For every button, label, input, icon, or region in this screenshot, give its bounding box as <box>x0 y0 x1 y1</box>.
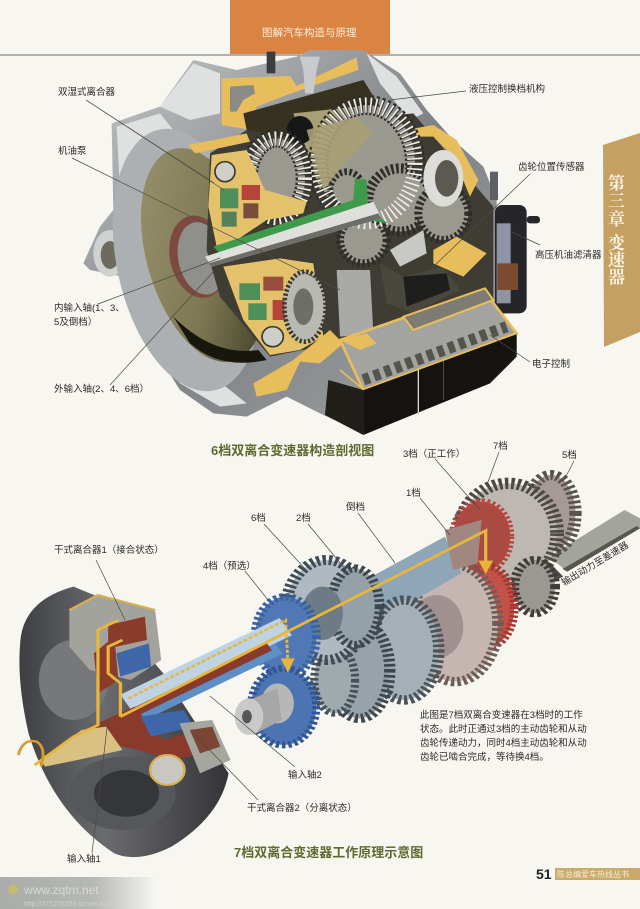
pink gear <box>410 565 498 682</box>
gears upper <box>248 105 468 263</box>
labels upper: 机油泵 <box>58 145 87 157</box>
upper clutch pack <box>208 150 307 247</box>
illustration: 6-speed transmission cutaway <box>83 50 540 435</box>
description text: 此图是7档双离合变速器在3档时的工作 <box>420 709 583 721</box>
chapter tab: 速 <box>608 250 626 270</box>
chapter tab: 变 <box>608 233 626 253</box>
input shaft green band <box>213 178 388 254</box>
yellow section inner hollow <box>230 85 255 112</box>
blue gears <box>251 597 316 745</box>
output hub <box>235 683 294 735</box>
bearing right <box>423 150 463 207</box>
labels lower: 干式离合器2（分离状态） <box>247 802 357 814</box>
leader lines upper <box>72 91 540 385</box>
input shaft <box>205 202 382 267</box>
bell ring <box>90 115 283 405</box>
description text: 状态。此时正通过3档的主动齿轮和从动 <box>420 723 587 735</box>
rotation arrow <box>18 741 43 767</box>
chapter tab: 器 <box>608 268 625 287</box>
labels upper: 外输入轴(2、4、6档） <box>54 383 149 395</box>
labels lower: 1档 <box>406 487 421 499</box>
housing highlights <box>117 53 423 407</box>
description text: 齿轮已啮合完成，等待换4档。 <box>420 751 549 763</box>
gear train lower right <box>337 230 487 337</box>
shift fork foreground <box>307 117 373 190</box>
oil filter <box>490 172 540 313</box>
yellow base section <box>253 330 343 397</box>
gear tooth highlights <box>248 105 415 222</box>
input shafts <box>98 627 286 730</box>
labels lower: 干式离合器1（接合状态） <box>54 544 164 556</box>
description text: 齿轮传递动力，同时4档主动齿轮和从动 <box>420 737 587 749</box>
labels lower: 输出动力至差速器 <box>559 539 631 589</box>
labels upper <box>54 83 602 395</box>
housing <box>83 50 517 433</box>
chapter tab: 第 <box>608 174 625 193</box>
bolt <box>300 57 320 93</box>
leader lines lower <box>92 452 574 853</box>
title: cutaway diagram: 6档双离合变速器构造剖视图 <box>211 443 374 458</box>
labels upper: 电子控制 <box>532 358 570 370</box>
labels lower: 倒档 <box>346 501 365 513</box>
page number strip <box>536 866 640 882</box>
electronic control black box <box>325 333 517 435</box>
output shaft <box>510 510 640 597</box>
labels upper: 液压控制换档机构 <box>469 83 545 95</box>
red gear 3 <box>453 502 510 572</box>
preselected flow arrow <box>129 620 295 698</box>
labels lower: 4档（预选） <box>203 560 256 572</box>
watermark: www.zqtm.net <box>23 883 99 897</box>
labels upper: 高压机油滤清器 <box>535 249 602 261</box>
clutch 1 <box>69 595 161 693</box>
flywheel <box>19 587 229 857</box>
chapter tab: 章 <box>608 210 625 229</box>
labels lower: 输入轴1 <box>67 853 101 865</box>
power flow arrow main <box>35 531 493 765</box>
labels upper: 齿轮位置传感器 <box>518 161 585 173</box>
top silver gears <box>459 475 576 613</box>
labels lower: 3档（正工作） <box>403 448 465 460</box>
labels upper: 内输入轴(1、3、 <box>54 302 125 314</box>
watermark: http://375278230.qzone.qq.com <box>24 901 123 908</box>
clutch bell olive <box>119 134 288 376</box>
labels upper: 5及倒档） <box>54 316 97 328</box>
labels lower: 输入轴2 <box>288 769 322 781</box>
top housing yellow section <box>188 57 478 197</box>
page number strip: 51 <box>536 866 552 882</box>
chapter tab: 三 <box>608 192 625 211</box>
description text <box>420 709 587 763</box>
clutch 2 <box>41 707 231 785</box>
disc gear with holes <box>284 272 326 342</box>
labels lower <box>54 440 631 865</box>
labels lower: 2档 <box>296 512 311 524</box>
lower clutch pack <box>223 258 323 355</box>
red gear lower <box>461 567 514 647</box>
electronic control top <box>340 288 517 390</box>
labels upper: 双湿式离合器 <box>58 86 116 98</box>
top stud <box>267 52 275 73</box>
chapter tab <box>603 133 640 347</box>
watermark <box>0 877 156 909</box>
left flange <box>93 230 127 277</box>
labels lower: 5档 <box>562 449 577 461</box>
header tab: 图解汽车构造与原理 <box>262 26 357 39</box>
header tab <box>230 0 390 54</box>
central sleeve <box>359 537 461 620</box>
labels lower: 7档 <box>493 440 508 452</box>
silver gears centre <box>286 560 439 718</box>
labels lower: 6档 <box>251 512 266 524</box>
cutaway interior <box>207 113 493 357</box>
title: working principle diagram: 7档双离合变速器工作原理示意图 <box>234 845 423 860</box>
shift mechanism <box>243 80 380 190</box>
page number strip: 陈总编爱车热线丛书 <box>557 869 629 879</box>
illustration: 7-speed working principle <box>18 475 640 857</box>
